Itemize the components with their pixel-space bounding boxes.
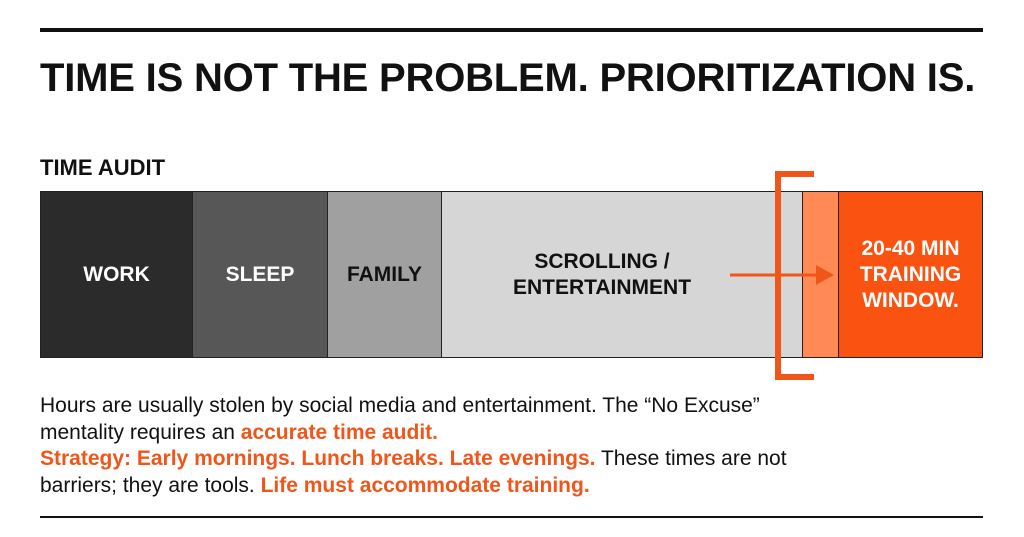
segment: training window: 20-40 MIN xyxy=(861,236,960,260)
text block: mentality requires an accurate time audit. xyxy=(40,420,438,444)
segment: work xyxy=(41,192,193,357)
title: TIME IS NOT THE PROBLEM. PRIORITIZATION IS. xyxy=(40,56,975,100)
segment: training window: TRAINING xyxy=(860,262,961,286)
segment: work: WORK xyxy=(83,262,150,286)
segment: training window: WINDOW. xyxy=(862,288,959,312)
text block xyxy=(40,394,787,496)
segment: family xyxy=(328,192,442,357)
segment: sleep: SLEEP xyxy=(226,262,294,286)
segment: family: FAMILY xyxy=(347,262,422,286)
segment: scrolling: ENTERTAINMENT xyxy=(513,276,691,298)
segment: training window xyxy=(839,192,982,357)
segment: scrolling xyxy=(442,192,803,357)
bar chart: time audit xyxy=(40,191,983,358)
segment: light orange xyxy=(803,192,839,357)
text block: Hours are usually stolen by social media and entertainment. The “No Excuse” xyxy=(40,394,760,417)
text block: barriers; they are tools. Life must accommodate training. xyxy=(40,474,590,496)
segment: sleep xyxy=(193,192,328,357)
text block: Strategy: Early mornings. Lunch breaks. Late evenings. These times are not xyxy=(40,447,787,470)
segment: scrolling: SCROLLING / xyxy=(534,250,670,272)
heading: time audit: TIME AUDIT xyxy=(40,155,165,180)
